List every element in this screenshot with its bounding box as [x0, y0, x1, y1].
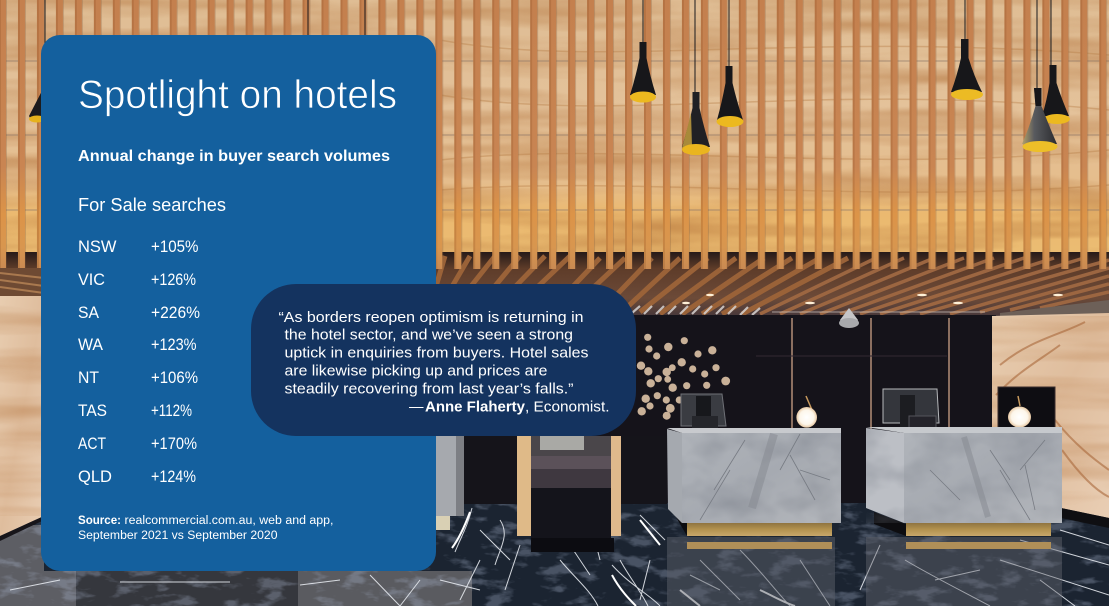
- table: search change by state: +105%: [151, 238, 199, 256]
- pendant lamp 4: [951, 39, 983, 100]
- central doorway and columns: [436, 436, 667, 552]
- pendant lamp 3: [716, 66, 744, 127]
- left desk lamp: [796, 396, 818, 431]
- right reception monitor: [883, 389, 939, 431]
- pendant lamp cords: [45, 0, 1051, 92]
- pendant lamp 0: [29, 85, 45, 122]
- right sandstone wall: [992, 313, 1109, 528]
- dark back wall: [436, 315, 996, 507]
- marble floor: [0, 503, 1109, 606]
- table: search change by state: +123%: [151, 336, 197, 354]
- quote text: uptick in enquiries from buyers. Hotel sales: [284, 346, 588, 362]
- table: search change by state: SA: [78, 304, 99, 322]
- table: search change by state: NT: [78, 369, 99, 387]
- section label: For Sale searches: [78, 195, 226, 215]
- table: search change by state: +106%: [151, 369, 198, 387]
- table: search change by state: NSW: [78, 238, 117, 256]
- quote attribution: Anne Flaherty: [425, 400, 525, 416]
- source note: September 2021 vs September 2020: [78, 530, 278, 542]
- quote text: the hotel sector, and we’ve seen a strong: [284, 328, 573, 344]
- pendant ceiling globe: [839, 308, 859, 328]
- left sandstone wall: [0, 268, 44, 541]
- quote text: [278, 310, 588, 398]
- callout: quote: [251, 284, 636, 436]
- decorative wall discs: [637, 334, 730, 420]
- panel: spotlight on hotels: [41, 35, 436, 571]
- table: search change by state: +112%: [151, 402, 192, 420]
- source note: Source:: [78, 515, 121, 527]
- table: search change by state: TAS: [78, 402, 107, 420]
- table: search change by state: [78, 238, 200, 486]
- left reception desk: [667, 428, 841, 536]
- quote attribution: [409, 400, 610, 416]
- pendant lamp 1: [630, 42, 656, 102]
- quote attribution: —: [409, 400, 424, 416]
- quote attribution: , Economist.: [525, 400, 610, 416]
- right desk lamp: [1006, 396, 1034, 431]
- lower fanned timber ceiling: [0, 252, 1109, 318]
- table: search change by state: +124%: [151, 468, 196, 486]
- pendant lamp 2: [682, 92, 710, 155]
- quote text: are likewise picking up and prices are: [284, 364, 548, 380]
- pendant lamp 6: [1022, 88, 1058, 152]
- table: search change by state: +170%: [151, 435, 197, 453]
- table: search change by state: +126%: [151, 271, 196, 289]
- right reception desk: [866, 427, 1062, 536]
- table: search change by state: QLD: [78, 468, 112, 486]
- table: search change by state: VIC: [78, 271, 105, 289]
- right recessed lamp niche: [998, 387, 1055, 432]
- source note: realcommercial.com.au, web and app,: [124, 515, 334, 527]
- title: Spotlight on hotels: [78, 73, 397, 117]
- subheading: Annual change in buyer search volumes: [78, 148, 390, 165]
- left reception monitor: [681, 394, 726, 431]
- pendant lamp 5: [1042, 65, 1070, 124]
- table: search change by state: WA: [78, 336, 103, 354]
- quote text: “As borders reopen optimism is returning in: [278, 310, 584, 326]
- table: search change by state: ACT: [78, 435, 106, 453]
- table: search change by state: +226%: [151, 304, 200, 322]
- source note: [78, 515, 334, 542]
- vertical timber slats: [0, 0, 1109, 269]
- quote text: steadily recovering from last year’s falls.”: [284, 382, 574, 398]
- upper sandstone ceiling: [0, 0, 1109, 254]
